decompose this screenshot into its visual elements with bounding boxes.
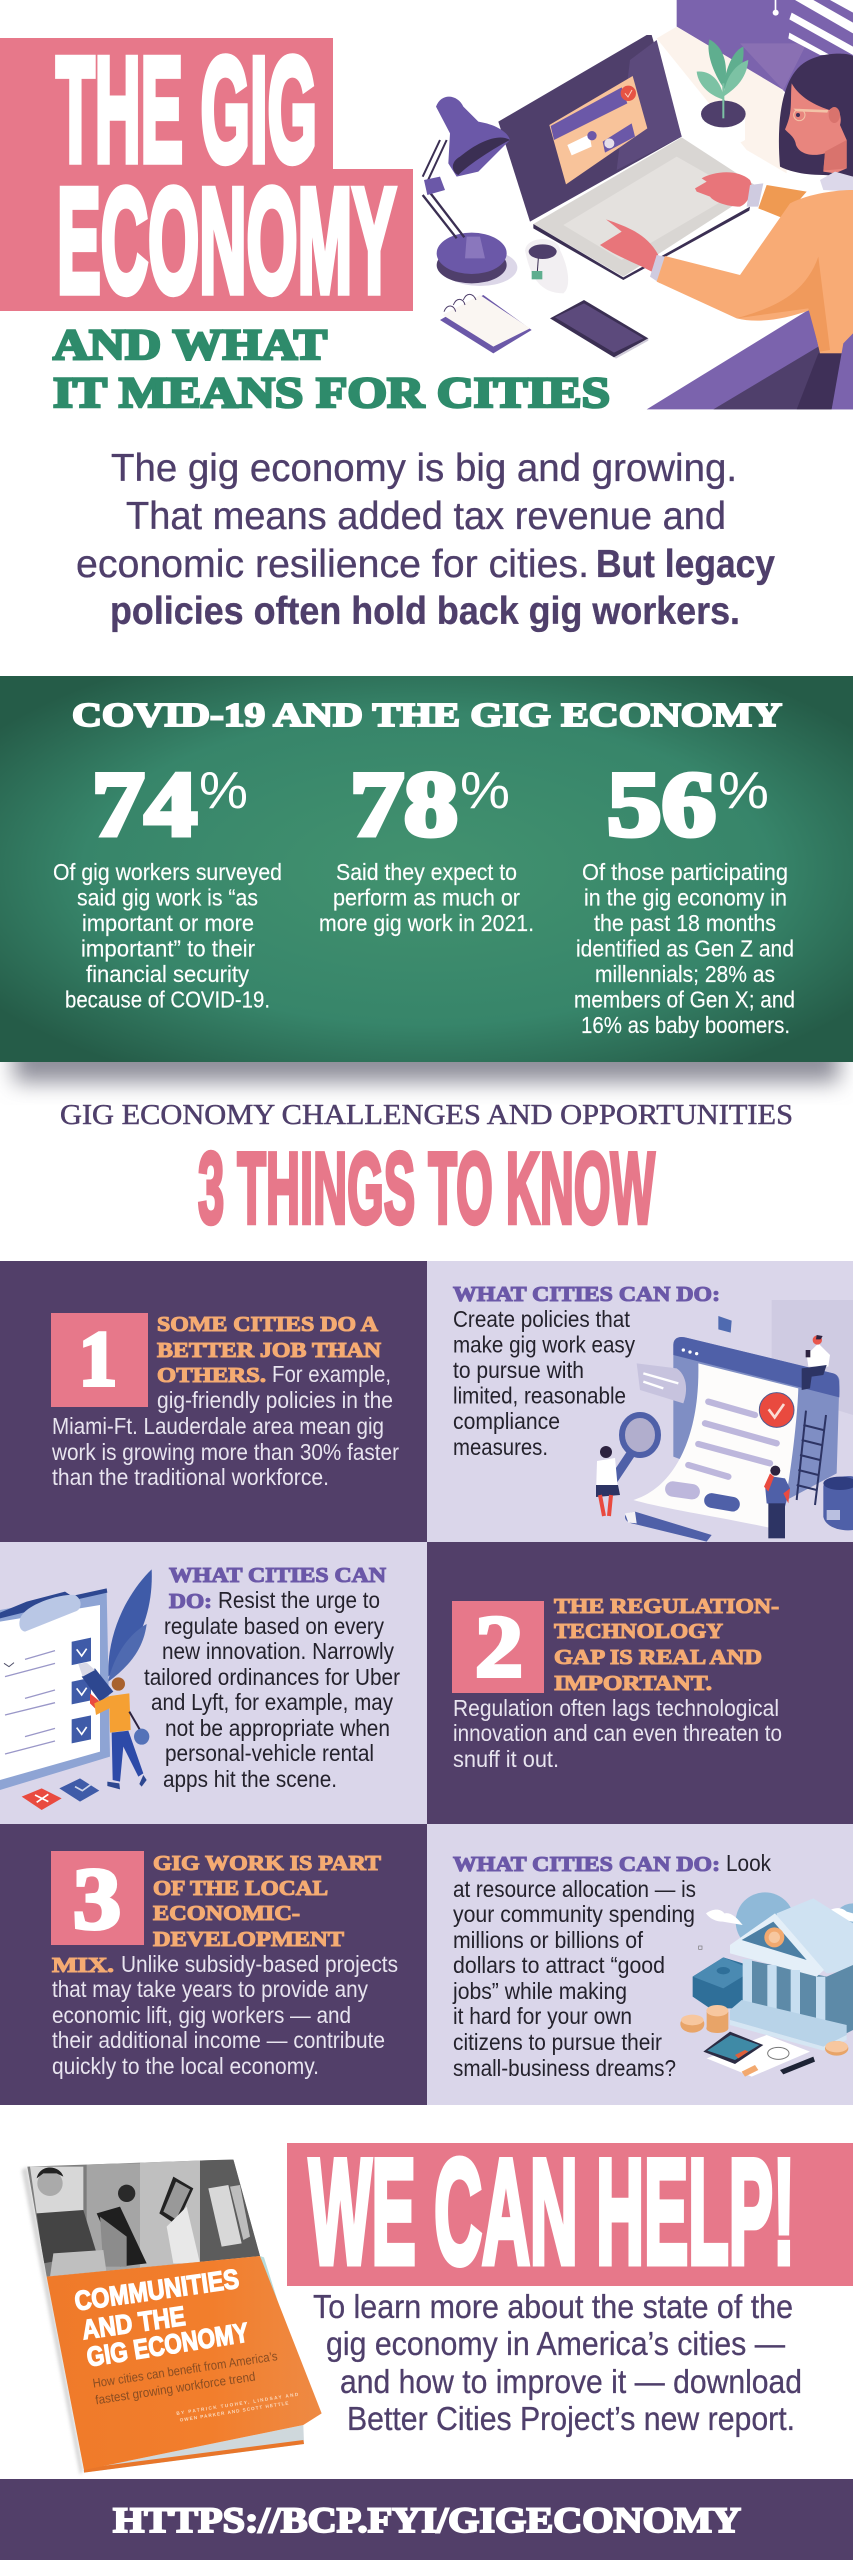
text block: not be appropriate when xyxy=(165,1715,390,1741)
cover subtitle: fastest growing workforce trend xyxy=(94,2370,256,2407)
cover subtitle: How cities can benefit from America’s xyxy=(92,2349,278,2391)
text block: make gig work easy xyxy=(453,1332,635,1358)
text block: new innovation. Narrowly xyxy=(162,1638,394,1664)
stat: 56%: % xyxy=(718,762,769,820)
panel: thing 1 xyxy=(0,1261,427,1542)
cover orange panel xyxy=(47,2256,322,2470)
subtitle xyxy=(53,322,610,417)
stat: 78%: perform as much or xyxy=(333,884,520,910)
text block: GIG WORK IS PART xyxy=(153,1851,381,1875)
stat: 78%: % xyxy=(460,762,510,820)
text block: limited, reasonable xyxy=(453,1382,626,1408)
text block: that may take years to provide any xyxy=(52,1976,368,2002)
notebook xyxy=(440,294,532,353)
text block: BETTER JOB THAN xyxy=(157,1338,381,1362)
text block: innovation and can even threaten to xyxy=(453,1720,782,1746)
text block: DEVELOPMENT xyxy=(153,1927,344,1951)
smartphone xyxy=(550,300,648,359)
call to action text: gig economy in America’s cities — xyxy=(326,2325,785,2362)
stat: 74%: Of gig workers surveyed xyxy=(53,859,282,885)
report cover: Communities and the Gig Economy xyxy=(20,2157,322,2475)
infographic page: ECONOMY xyxy=(57,157,396,324)
cover byline: OWEN PARKER AND SCOTT HETTLE xyxy=(179,2401,289,2423)
text block: TECHNOLOGY xyxy=(554,1619,723,1643)
panel shadow xyxy=(14,1036,839,1082)
text block xyxy=(453,1282,720,1460)
woman xyxy=(600,54,853,409)
number badge 1 xyxy=(51,1313,148,1407)
laptop xyxy=(498,35,760,280)
stat: 56% xyxy=(574,753,795,1038)
panel: what cities can do 3 xyxy=(427,1824,853,2105)
footer link bar: HTTPS://BCP.FYI/GIGECONOMY xyxy=(113,2500,741,2540)
intro text: That means added tax revenue and xyxy=(126,495,726,538)
panel: COVID-19 and the gig economy xyxy=(0,676,853,1062)
text block: DO: xyxy=(169,1589,212,1613)
subtitle: AND WHAT xyxy=(53,322,327,369)
text block: snuff it out. xyxy=(453,1746,559,1772)
text block: Unlike subsidy-based projects xyxy=(121,1951,398,1977)
text block: ECONOMIC- xyxy=(153,1901,300,1925)
text block xyxy=(51,1312,399,1490)
text block: IMPORTANT. xyxy=(554,1671,712,1695)
page edges xyxy=(83,2425,304,2473)
coffee cup xyxy=(525,239,568,293)
plant xyxy=(697,39,748,144)
text block: WHAT CITIES CAN xyxy=(169,1563,386,1587)
stat: 74%: said gig work is “as xyxy=(77,884,258,910)
number badge 1: 1 xyxy=(79,1315,117,1402)
stat: 56%: identified as Gen Z and xyxy=(576,936,794,962)
text block xyxy=(144,1563,400,1792)
text block: quickly to the local economy. xyxy=(52,2053,319,2079)
intro text xyxy=(76,447,775,633)
text block: it hard for your own xyxy=(453,2003,632,2029)
stat: 56%: Of those participating xyxy=(582,859,788,885)
desk lamp xyxy=(423,97,517,286)
stat: 78%: Said they expect to xyxy=(336,859,517,885)
text block: THE REGULATION- xyxy=(554,1594,779,1618)
number badge 2: 2 xyxy=(475,1599,523,1696)
intro text: But legacy xyxy=(596,543,775,586)
stat: 74%: financial security xyxy=(86,961,249,987)
number badge 3 xyxy=(51,1851,144,1948)
stat: 56%: millennials; 28% as xyxy=(595,961,775,987)
text block: millions or billions of xyxy=(453,1927,644,1953)
text block: your community spending xyxy=(453,1901,695,1927)
title block: The Gig Economy xyxy=(0,26,413,324)
stat: 56%: in the gig economy in xyxy=(584,884,787,910)
stat: 78%: 78 xyxy=(350,753,458,855)
text block: For example, xyxy=(272,1361,391,1387)
intro text: economic resilience for cities. xyxy=(76,543,589,586)
desk xyxy=(657,27,787,173)
subtitle: IT MEANS FOR CITIES xyxy=(53,370,610,417)
call to action text: and how to improve it — download xyxy=(340,2363,802,2400)
number badge 2 xyxy=(452,1599,544,1696)
intro text: The gig economy is big and growing. xyxy=(111,447,737,490)
text block: Miami-Ft. Lauderdale area mean gig xyxy=(52,1413,384,1439)
text block: small-business dreams? xyxy=(453,2055,676,2081)
section kicker: GIG ECONOMY CHALLENGES AND OPPORTUNITIES xyxy=(60,1099,793,1131)
wall with window stripes xyxy=(677,0,853,140)
text block: OF THE LOCAL xyxy=(153,1876,328,1900)
text block: dollars to attract “good xyxy=(453,1952,665,1978)
text block: WHAT CITIES CAN DO: xyxy=(453,1282,720,1306)
text block: gig-friendly policies in the xyxy=(157,1387,393,1413)
text block: OTHERS. xyxy=(157,1363,266,1387)
text block: their additional income — contribute xyxy=(52,2027,385,2053)
call to action text: To learn more about the state of the xyxy=(313,2288,793,2325)
text block xyxy=(452,1850,771,2081)
text block: and Lyft, for example, may xyxy=(151,1689,393,1715)
panel: thing 2 xyxy=(427,1542,853,1824)
text block: jobs” while making xyxy=(452,1978,627,2004)
stat: 78%: more gig work in 2021. xyxy=(319,910,534,936)
text block: than the traditional workforce. xyxy=(52,1464,329,1490)
panel: thing 3 xyxy=(0,1824,427,2105)
stat: 74%: 74 xyxy=(92,753,197,855)
cover subtitle xyxy=(92,2349,278,2407)
text block: measures. xyxy=(453,1434,548,1460)
stat: 78% xyxy=(319,753,534,936)
illustration: bank with money xyxy=(680,1892,853,2077)
stat: 74%: % xyxy=(199,762,248,820)
text block: tailored ordinances for Uber xyxy=(144,1664,400,1690)
magnifying glass and figure xyxy=(596,1415,658,1516)
text block: Regulation often lags technological xyxy=(453,1695,779,1721)
text block: Look xyxy=(726,1850,771,1876)
stat: 74%: important or more xyxy=(82,910,254,936)
text block: citizens to pursue their xyxy=(453,2029,662,2055)
stat: 56%: the past 18 months xyxy=(594,910,776,936)
stat: 74%: because of COVID-19. xyxy=(65,986,270,1012)
text block xyxy=(453,1594,782,1772)
call to action text xyxy=(313,2288,802,2437)
number badge 3: 3 xyxy=(73,1851,121,1948)
text block: Resist the urge to xyxy=(218,1587,380,1613)
panel: what cities can do 2 xyxy=(0,1542,427,1824)
cover title: GIG ECONOMY xyxy=(84,2316,251,2373)
text block: MIX. xyxy=(52,1953,114,1977)
stat: 74%: important” to their xyxy=(81,936,255,962)
text block: to pursue with xyxy=(453,1357,584,1383)
text block: economic lift, gig workers — and xyxy=(52,2002,351,2028)
text block: GAP IS REAL AND xyxy=(554,1645,762,1669)
intro text: policies often hold back gig workers. xyxy=(110,590,740,633)
header illustration: woman working at laptop xyxy=(423,0,853,409)
purple floor and chair xyxy=(647,287,853,409)
text block: WHAT CITIES CAN DO: xyxy=(453,1852,720,1876)
text block: Create policies that xyxy=(453,1306,631,1332)
stat: 74% xyxy=(53,753,282,1012)
cover photo xyxy=(28,2160,260,2276)
text block: compliance xyxy=(453,1408,560,1434)
cover title xyxy=(73,2263,251,2373)
illustration: oversized document xyxy=(625,1300,853,1542)
text block xyxy=(52,1851,398,2079)
stat: 56%: members of Gen X; and xyxy=(574,986,795,1012)
call to action text: Better Cities Project’s new report. xyxy=(347,2400,795,2437)
cover title: AND THE xyxy=(80,2300,187,2345)
stat: 56%: 56 xyxy=(607,753,716,855)
footer link bar xyxy=(0,2479,853,2560)
text block: SOME CITIES DO A xyxy=(157,1312,379,1336)
text block: apps hit the scene. xyxy=(163,1766,337,1792)
panel: what cities can do 1 xyxy=(427,1261,853,1542)
text block: regulate based on every xyxy=(164,1613,384,1639)
title block: The Gig Economy: THE GIG xyxy=(56,26,317,193)
text block: personal-vehicle rental xyxy=(165,1740,374,1766)
text block: at resource allocation — is xyxy=(453,1876,696,1902)
panel heading: COVID-19 AND THE GIG ECONOMY xyxy=(72,697,782,734)
illustration: checklist clipboard xyxy=(0,1569,152,1810)
text block: work is growing more than 30% faster xyxy=(51,1439,399,1465)
cover title: COMMUNITIES xyxy=(73,2263,241,2317)
stat: 56%: 16% as baby boomers. xyxy=(581,1012,790,1038)
cover byline: BY PATRICK TUOHEY, LINDSAY AND xyxy=(176,2392,299,2416)
